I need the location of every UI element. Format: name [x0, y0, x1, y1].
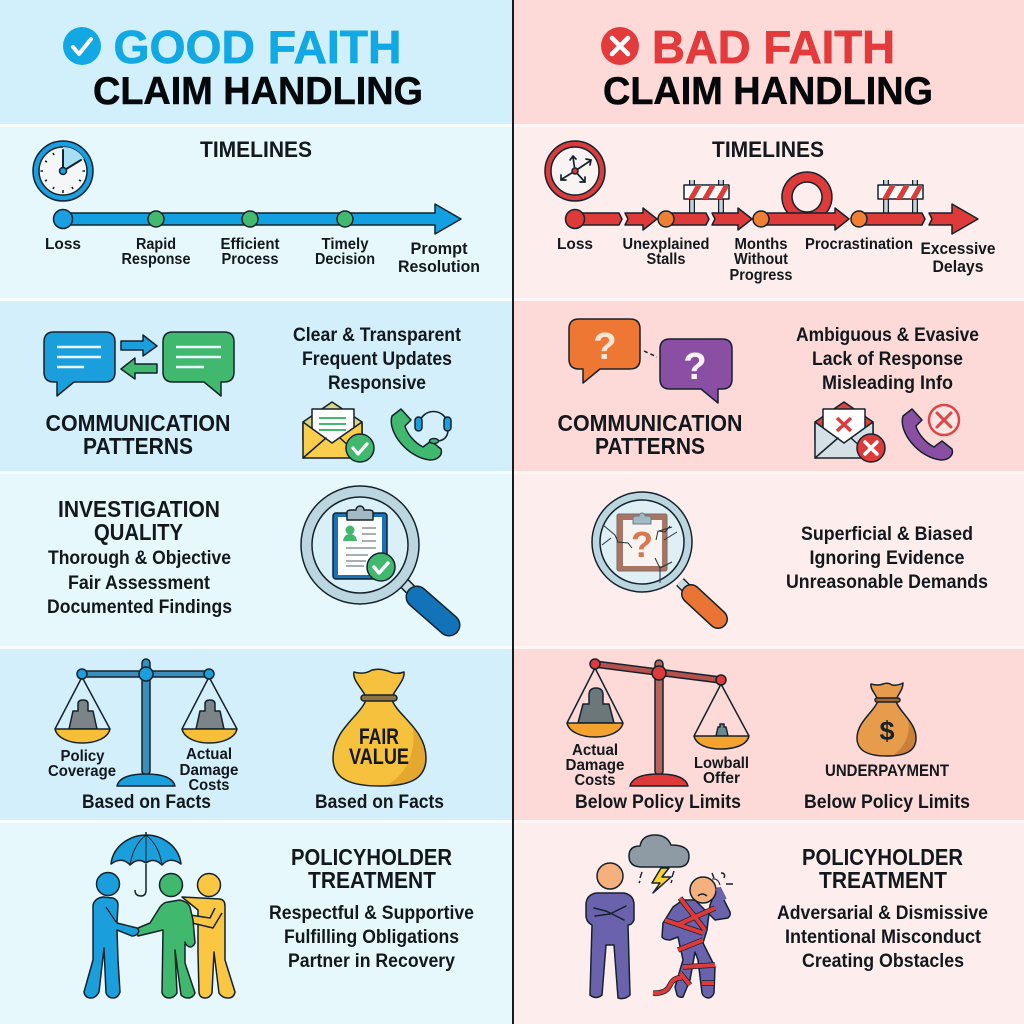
panel: bad investigation: [514, 474, 1024, 646]
arrow through loop: [761, 208, 849, 230]
scale labels: [566, 742, 749, 789]
timeline segments with barriers and loop: [566, 172, 978, 234]
timeline labels: Progress: [730, 267, 792, 284]
panel: bad policyholder treatment: [514, 823, 1024, 1024]
panel: bad timelines: [514, 127, 1024, 298]
scale labels: Coverage: [48, 763, 116, 780]
icon: envelope with x: [815, 402, 885, 462]
icon: magnifier with clipboard: [301, 486, 449, 625]
caption: Below Policy Limits: [804, 792, 970, 813]
scale labels: Policy: [60, 748, 105, 765]
text block: [786, 524, 988, 593]
icon: clock: [33, 141, 93, 201]
timeline labels: Delays: [932, 257, 984, 276]
heading: claim handling: CLAIM HANDLING: [93, 70, 423, 113]
heading: PATTERNS: [83, 433, 193, 459]
timeline arrow: [54, 204, 461, 234]
text block: Intentional Misconduct: [785, 927, 982, 948]
timeline labels: [557, 236, 996, 284]
timeline labels: Months: [734, 236, 788, 253]
text block: Creating Obstacles: [802, 951, 964, 972]
scale labels: Damage: [566, 757, 625, 774]
icon: purple question bubble: ?: [683, 346, 707, 388]
icon: exchange arrows: [121, 335, 157, 379]
icon: orange question bubble: ?: [593, 326, 617, 368]
heading: TREATMENT: [308, 867, 436, 893]
icon: phone with x: [902, 405, 959, 460]
timeline labels: Efficient: [220, 236, 280, 253]
panel: good timelines: [0, 127, 512, 298]
icon: underpayment money bag: [857, 683, 916, 756]
scale labels: Lowball: [694, 755, 749, 772]
panel: good settlement: [0, 649, 512, 820]
panel: good policyholder treatment: [0, 823, 512, 1024]
heading: TIMELINES: [712, 137, 824, 162]
text block: [293, 325, 462, 394]
heading: good faith: GOOD FAITH: [114, 21, 402, 73]
heading: COMMUNICATION: [46, 410, 230, 436]
text block: Unreasonable Demands: [786, 572, 988, 593]
panel: bad faith header: [514, 0, 1024, 124]
scale labels: Offer: [703, 770, 740, 787]
text block: Fulfilling Obligations: [284, 927, 459, 948]
heading: [46, 410, 230, 459]
timeline labels: Prompt: [410, 239, 468, 258]
text block: [777, 903, 988, 972]
text block: Lack of Response: [812, 349, 963, 370]
icon: blue speech bubble: [44, 332, 115, 396]
scale labels: Damage: [180, 762, 239, 779]
scale labels: [48, 746, 239, 794]
text block: [269, 903, 474, 972]
timeline labels: Process: [222, 251, 278, 268]
icon: balanced scale: [55, 659, 237, 786]
dashed connector: [644, 351, 657, 357]
heading: [291, 844, 452, 893]
heading: PATTERNS: [595, 433, 705, 459]
icon: barrier one: [684, 180, 729, 213]
heading: TREATMENT: [819, 867, 947, 893]
heading: POLICYHOLDER: [291, 844, 452, 870]
text block: Thorough & Objective: [48, 548, 231, 569]
scale labels: Actual: [572, 742, 618, 759]
caption: Below Policy Limits: [575, 792, 741, 813]
caption: Based on Facts: [82, 792, 211, 813]
panel: bad settlement: [514, 649, 1024, 820]
timeline labels: Timely: [322, 236, 369, 253]
text block: Partner in Recovery: [288, 951, 455, 972]
heading: TIMELINES: [200, 137, 312, 162]
text block: Fair Assessment: [68, 573, 211, 594]
icon: blue person: [84, 872, 139, 998]
icon: storm cloud: [629, 835, 689, 893]
icon: fair value money bag: FAIR: [359, 724, 399, 749]
timeline labels: Resolution: [398, 257, 480, 276]
text block: Frequent Updates: [302, 349, 452, 370]
timeline labels: Without: [734, 251, 788, 268]
icon: person tangled in red tape: [653, 873, 733, 998]
scale labels: Costs: [188, 777, 230, 794]
heading: COMMUNICATION: [558, 410, 742, 436]
icon: yellow person: [182, 874, 235, 998]
timeline labels: Stalls: [646, 251, 686, 268]
text block: [796, 325, 979, 394]
heading: [58, 496, 220, 545]
icon: x circle: [601, 27, 639, 65]
icon: tilted scale: [567, 659, 749, 786]
text block: Superficial & Biased: [801, 524, 973, 545]
timeline labels: Loss: [557, 236, 593, 253]
icon: umbrella: [111, 832, 181, 896]
caption: Based on Facts: [315, 792, 444, 813]
icon: barrier two: [878, 180, 923, 213]
heading: INVESTIGATION: [58, 496, 220, 522]
text block: Misleading Info: [822, 373, 953, 394]
text block: Adversarial & Dismissive: [777, 903, 988, 924]
text block: Clear & Transparent: [293, 325, 462, 346]
icon: fair value money bag: [333, 669, 426, 786]
icon: green speech bubble: [163, 332, 234, 396]
icon: cracked magnifier: ?: [631, 524, 653, 565]
icon: fair value money bag: VALUE: [349, 744, 409, 769]
timeline labels: Loss: [45, 236, 81, 253]
text block: Ambiguous & Evasive: [796, 325, 979, 346]
timeline labels: Rapid: [136, 236, 176, 253]
icon: underpayment money bag: $: [879, 716, 895, 746]
icon: envelope with check: [303, 402, 374, 462]
timeline labels: Response: [122, 251, 191, 268]
panel: good communication: [0, 301, 512, 471]
timeline labels: Excessive: [920, 239, 996, 258]
icon: orange question bubble: [569, 319, 640, 383]
text block: Responsive: [328, 373, 426, 394]
timeline labels: [45, 236, 480, 276]
text block: Respectful & Supportive: [269, 903, 474, 924]
text block: [47, 548, 232, 618]
text block: Documented Findings: [47, 597, 232, 618]
icon: green person: [137, 874, 195, 998]
heading: POLICYHOLDER: [802, 844, 963, 870]
panel: bad communication: [514, 301, 1024, 471]
icon: arms crossed person: [586, 863, 634, 999]
heading: [802, 844, 963, 893]
icon: check circle: [63, 27, 101, 65]
panel: good investigation: [0, 474, 512, 646]
scale labels: Actual: [186, 746, 232, 763]
text block: Ignoring Evidence: [810, 548, 964, 569]
timeline labels: Decision: [315, 251, 375, 268]
icon: loop ring: [782, 172, 832, 222]
heading: bad faith: BAD FAITH: [652, 21, 895, 73]
icon: purple question bubble: [660, 339, 732, 403]
icon: broken clock: [545, 141, 605, 201]
heading: claim handling: CLAIM HANDLING: [603, 70, 933, 113]
scale labels: Costs: [574, 772, 616, 789]
heading: [558, 410, 742, 459]
underpayment label: UNDERPAYMENT: [825, 761, 950, 780]
timeline labels: Procrastination: [805, 236, 913, 253]
icon: cracked magnifier: [592, 492, 718, 619]
heading: QUALITY: [94, 519, 183, 545]
icon: phone with headset: [391, 409, 451, 460]
timeline labels: Unexplained: [622, 236, 710, 253]
panel: good faith header: [0, 0, 512, 124]
